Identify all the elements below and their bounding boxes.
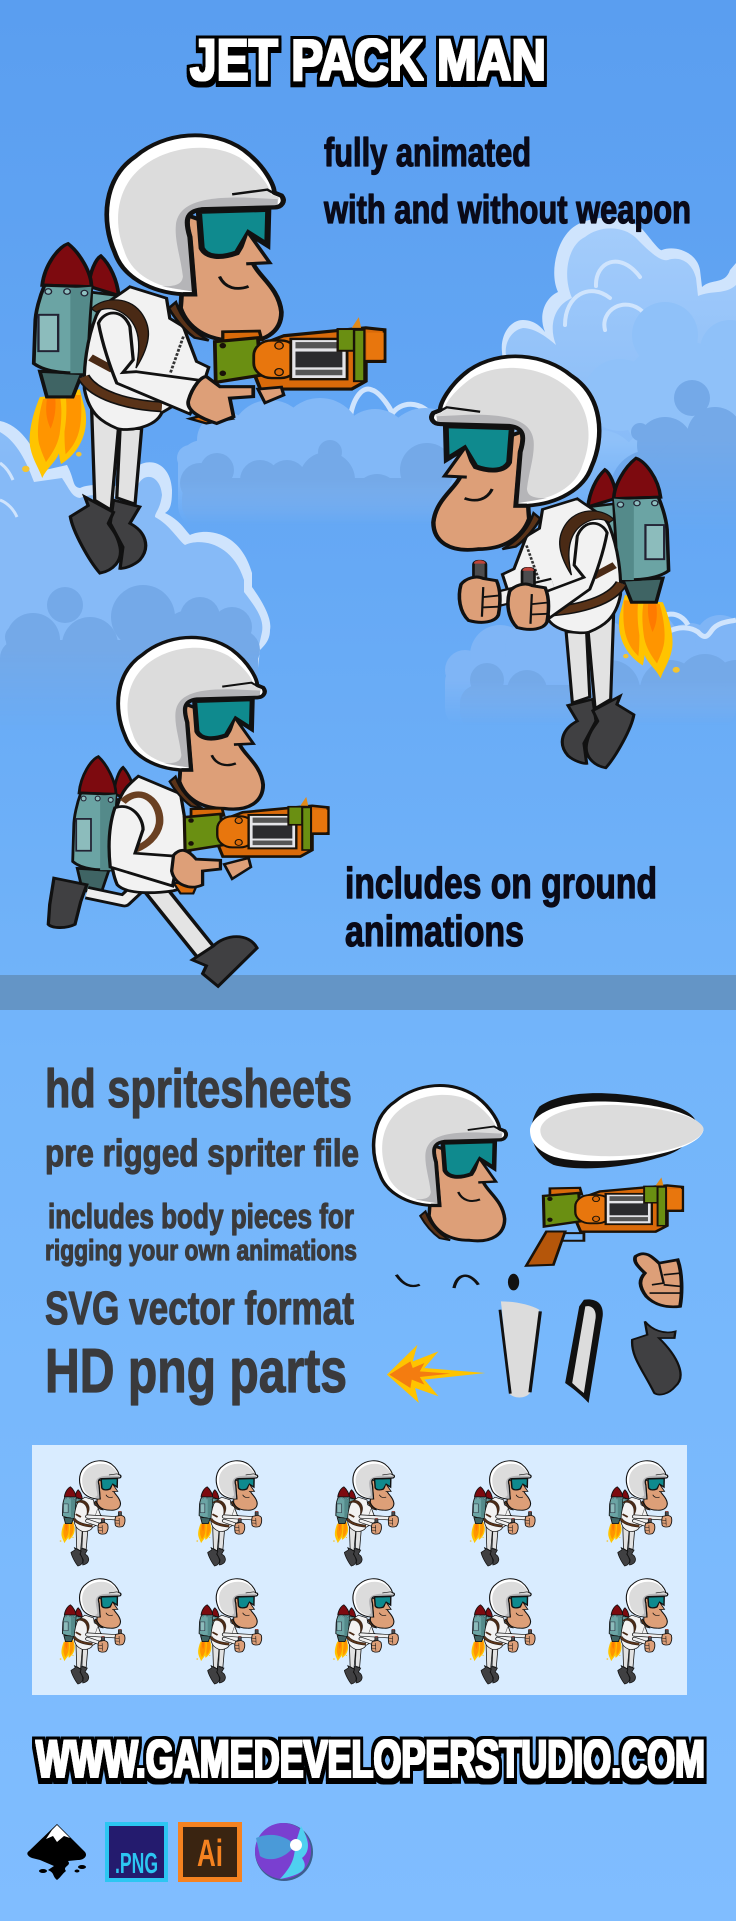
sprite frames row 2 [60,1579,672,1684]
text: hd spritesheets: hd spritesheets [45,1059,352,1119]
body parts sheet [374,1086,704,1403]
icon: spriter orb [255,1823,313,1881]
part: boot [632,1321,681,1395]
character: flying without weapon [432,356,680,768]
part: thumb hand [635,1254,682,1307]
part: torso shell [530,1093,704,1168]
part: upper leg [500,1301,540,1397]
part: head [374,1086,506,1241]
text: rigging your own animations: rigging your own animations [45,1235,357,1267]
clouds [0,218,736,740]
part: lower leg [565,1299,603,1403]
text: pre rigged spriter file: pre rigged spriter file [45,1133,359,1175]
cloud: left [0,421,270,686]
title: JET PACK MAN [190,28,546,93]
sprite frames row 1 [60,1461,672,1566]
part: gun [526,1177,683,1266]
text: fully animated: fully animated [324,131,531,175]
icon: png file: .PNG [115,1848,158,1880]
part: muzzle flash [387,1345,485,1403]
icon: png file [105,1822,168,1882]
feature list [45,1059,359,1406]
icon: adobe illustrator: Ai [197,1833,223,1875]
icon: adobe illustrator [178,1822,242,1882]
part: eye and mouth pieces [396,1274,519,1290]
cloud: bottom right [445,612,736,709]
text: HD png parts: HD png parts [45,1337,347,1406]
cloud: middle [177,386,457,514]
icon: inkscape [27,1824,86,1880]
character: flying with gun [22,135,385,573]
text: includes body pieces for: includes body pieces for [48,1198,354,1236]
text: animations: animations [345,907,524,956]
panel: spritesheet preview [32,1445,687,1695]
divider band [0,975,736,1010]
character: running with gun [48,637,328,986]
text: SVG vector format: SVG vector format [45,1282,354,1334]
cloud: top right [502,218,736,508]
